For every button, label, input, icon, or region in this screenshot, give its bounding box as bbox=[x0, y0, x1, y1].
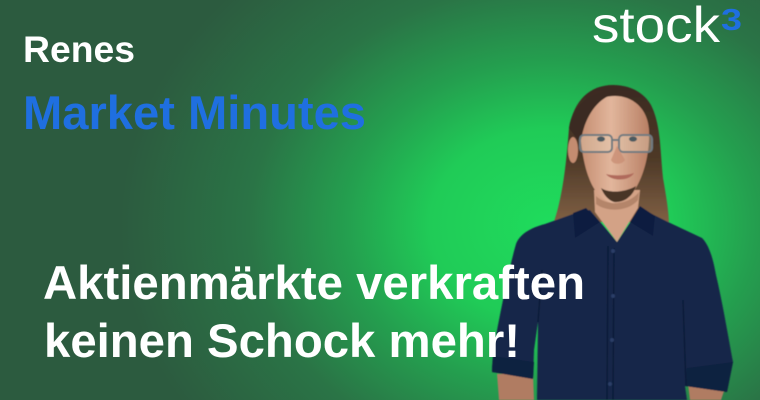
headline bbox=[43, 256, 585, 367]
headline line 1: Aktienmärkte verkraften bbox=[43, 256, 585, 309]
headline line 2: keinen Schock mehr! bbox=[44, 314, 520, 367]
logo: stock3 bbox=[592, 0, 742, 53]
collar bbox=[573, 206, 655, 238]
eyes bbox=[597, 136, 605, 142]
neck bbox=[594, 190, 640, 242]
face bbox=[580, 96, 649, 203]
hair left over forehead bbox=[569, 91, 618, 140]
title: Renes: Renes bbox=[23, 29, 135, 70]
hair back bbox=[552, 85, 669, 235]
mouth bbox=[606, 173, 634, 180]
nose bbox=[611, 146, 625, 164]
shirt bbox=[492, 208, 733, 400]
neck shadow bbox=[596, 192, 639, 210]
forearms bbox=[497, 374, 725, 400]
logo superscript: 3 bbox=[721, 2, 742, 37]
title: Market Minutes: Market Minutes bbox=[23, 86, 366, 139]
goatee bbox=[601, 186, 636, 202]
photo: presenter bbox=[492, 85, 733, 400]
shirt buttons bbox=[608, 249, 615, 386]
ear bbox=[568, 137, 578, 163]
glasses bbox=[580, 135, 652, 152]
shirt cuffs bbox=[492, 356, 733, 392]
shirt placket bbox=[538, 246, 686, 400]
